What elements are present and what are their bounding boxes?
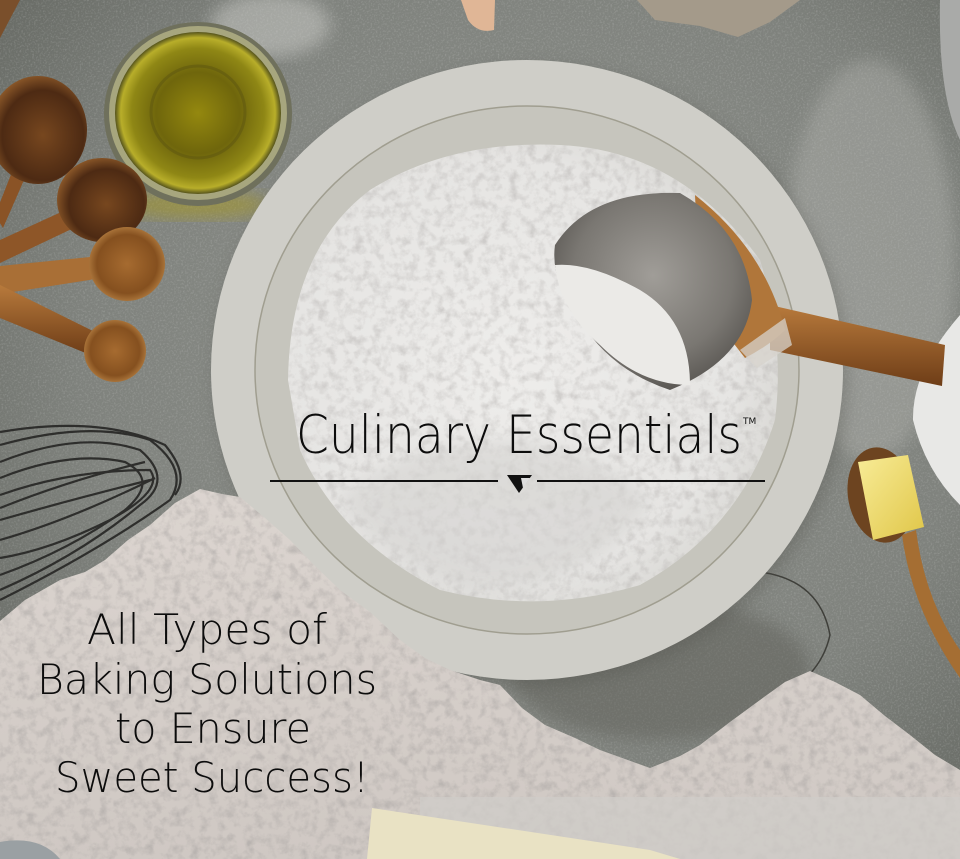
- corner wooden handle: [0, 0, 20, 38]
- top bowl fragment: [637, 0, 800, 37]
- trademark: TM: [742, 417, 756, 427]
- butter on wooden spoon: [840, 442, 960, 678]
- tagline: to Ensure: [115, 704, 311, 753]
- egg shell fragment: [461, 0, 495, 31]
- tagline: All Types of: [87, 605, 327, 654]
- spoon 2: [0, 158, 147, 263]
- spoon 1: [0, 76, 87, 228]
- tagline: [37, 605, 377, 802]
- tagline: Sweet Success!: [55, 753, 369, 802]
- flour strip at bottom: [420, 797, 960, 859]
- tagline: Baking Solutions: [37, 655, 377, 704]
- large flour bowl: [211, 60, 847, 686]
- corner metal bowl: [940, 0, 960, 140]
- title: Culinary Essentials: Culinary Essentials: [296, 405, 742, 466]
- cream paper corner: [367, 808, 680, 859]
- title divider with triangle emblem: [270, 475, 765, 493]
- dark corner at bottom left: [0, 840, 60, 859]
- butter pat: [858, 455, 924, 540]
- wire whisk: [0, 426, 181, 600]
- white plate at right edge: [913, 315, 960, 505]
- flour pile foreground: [0, 480, 960, 859]
- flour mound: [280, 140, 790, 620]
- spoon 3: [0, 227, 165, 301]
- spoon 4: [0, 285, 146, 382]
- olive oil glass bowl: [104, 22, 292, 219]
- wooden spoon in flour: [554, 193, 945, 390]
- measuring spoons: [0, 76, 165, 382]
